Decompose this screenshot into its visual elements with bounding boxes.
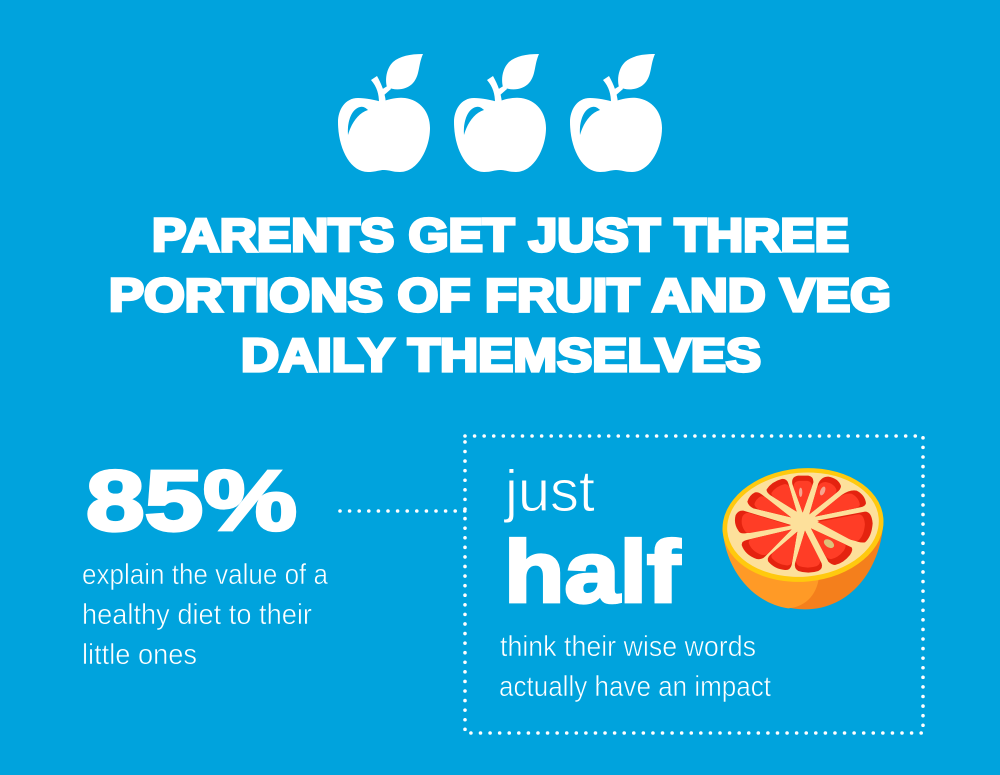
icon: apple 1 [338, 54, 430, 172]
text: explain the value: healthy diet to their [82, 599, 312, 631]
stat: 85%: 85% [86, 454, 297, 549]
segments: light [742, 481, 865, 568]
icon: apple 3 [570, 54, 662, 172]
text: just: just [503, 459, 595, 524]
title: PARENTS GET JUST THREE [152, 209, 849, 261]
text: think their wise words [499, 631, 771, 703]
text: explain the value [82, 559, 329, 671]
stat: half: half [504, 524, 681, 621]
text: explain the value: little ones [82, 639, 197, 671]
title [109, 209, 891, 381]
panel: dotted callout box [465, 436, 923, 733]
text: think their wise words: actually have an impact [499, 671, 771, 703]
title: DAILY THEMSELVES [241, 329, 761, 381]
text: think their wise words: think their wise words [500, 631, 756, 663]
icon: apple 2 [454, 54, 546, 172]
title: PORTIONS OF FRUIT AND VEG [109, 269, 891, 321]
icon: three apples [338, 54, 662, 172]
icon: grapefruit half [718, 462, 888, 609]
text: explain the value: explain the value of a [82, 559, 329, 591]
segments: dark [735, 476, 873, 573]
dotted connector [340, 509, 465, 513]
